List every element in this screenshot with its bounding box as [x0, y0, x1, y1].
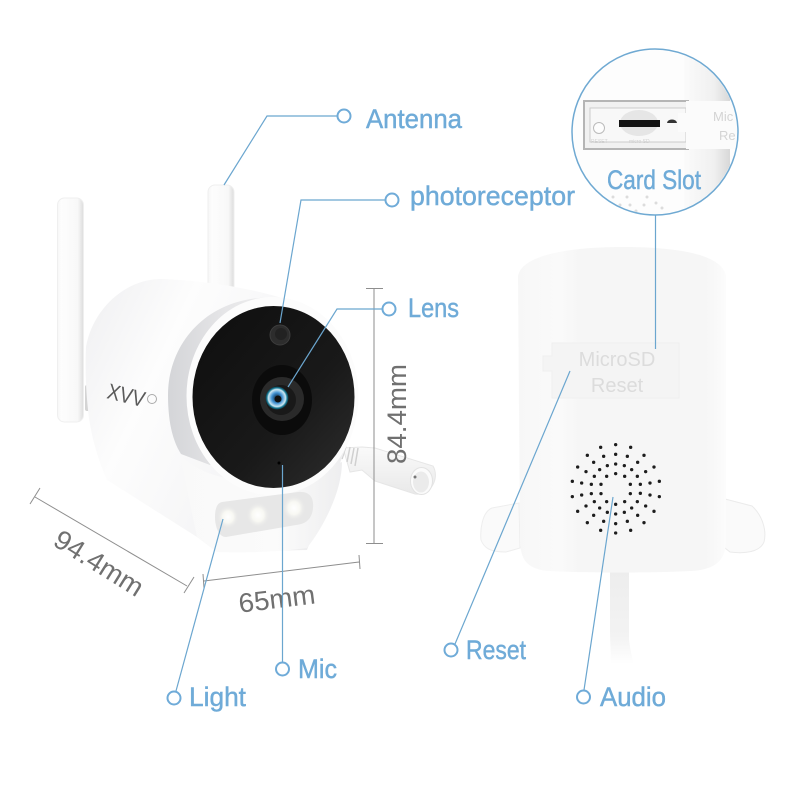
left bracket [481, 503, 520, 552]
cable [610, 572, 634, 664]
back view of camera [481, 247, 765, 664]
lower mount [180, 455, 342, 552]
magnifier outline [572, 49, 738, 215]
XVV logo: XVV [105, 379, 148, 412]
callout: Reset [444, 371, 570, 665]
right antenna [208, 185, 234, 305]
peeled label [686, 101, 730, 149]
camera body [86, 279, 345, 552]
LED light bar [215, 492, 313, 537]
magnified housing: Re [719, 128, 736, 143]
dimension: width 65mm [203, 555, 360, 619]
callout: photoreceptor: photoreceptor [410, 181, 575, 211]
callout: Lens: Lens [408, 293, 459, 323]
callout: photoreceptor [280, 181, 575, 323]
left antenna [58, 198, 84, 422]
magnifier background [572, 49, 738, 215]
magnified housing: micro SD [629, 139, 650, 145]
dimension: depth 94.4mm [30, 488, 194, 603]
power connector [342, 446, 435, 494]
magnified housing [583, 61, 735, 212]
magnified housing: Mic [713, 109, 734, 124]
speaker grille [571, 443, 661, 535]
callout: Antenna [224, 104, 463, 185]
MicroSD Reset label: Reset [591, 375, 644, 397]
right bracket [725, 499, 765, 553]
reset button [594, 122, 604, 134]
MicroSD Reset label: MicroSD [579, 349, 655, 371]
dimension: depth 94.4mm: 94.4mm [48, 524, 149, 603]
MicroSD Reset label [543, 343, 679, 398]
callout: Mic [276, 465, 337, 684]
back housing [518, 247, 726, 572]
callout: Card Slot: Card Slot [607, 165, 701, 195]
mic hole [278, 462, 280, 464]
antenna hinge [85, 385, 93, 411]
card slot opening [620, 110, 658, 136]
dimension: height 84.4mm [366, 288, 412, 544]
callout: Light [168, 519, 246, 712]
card slot magnifier [570, 49, 740, 220]
callout: Audio: Audio [600, 682, 666, 712]
face rim [186, 297, 358, 495]
callout: Reset: Reset [466, 635, 526, 665]
silver ring [168, 297, 285, 465]
black lens panel [192, 306, 354, 488]
callout: Light: Light [189, 682, 246, 712]
indicator [667, 120, 677, 123]
callout: Lens [288, 293, 459, 387]
faint speaker dots [612, 196, 664, 212]
dimension: width 65mm: 65mm [237, 579, 317, 619]
slot recess [584, 101, 688, 149]
slot labels: RESET [591, 139, 608, 145]
callout: Antenna: Antenna [366, 104, 463, 134]
callout: Mic: Mic [298, 654, 337, 684]
photoreceptor window [270, 325, 290, 345]
dimension: height 84.4mm: 84.4mm [382, 364, 412, 464]
camera illustration [58, 185, 435, 552]
callout: Audio [577, 497, 666, 712]
lens [252, 365, 312, 435]
